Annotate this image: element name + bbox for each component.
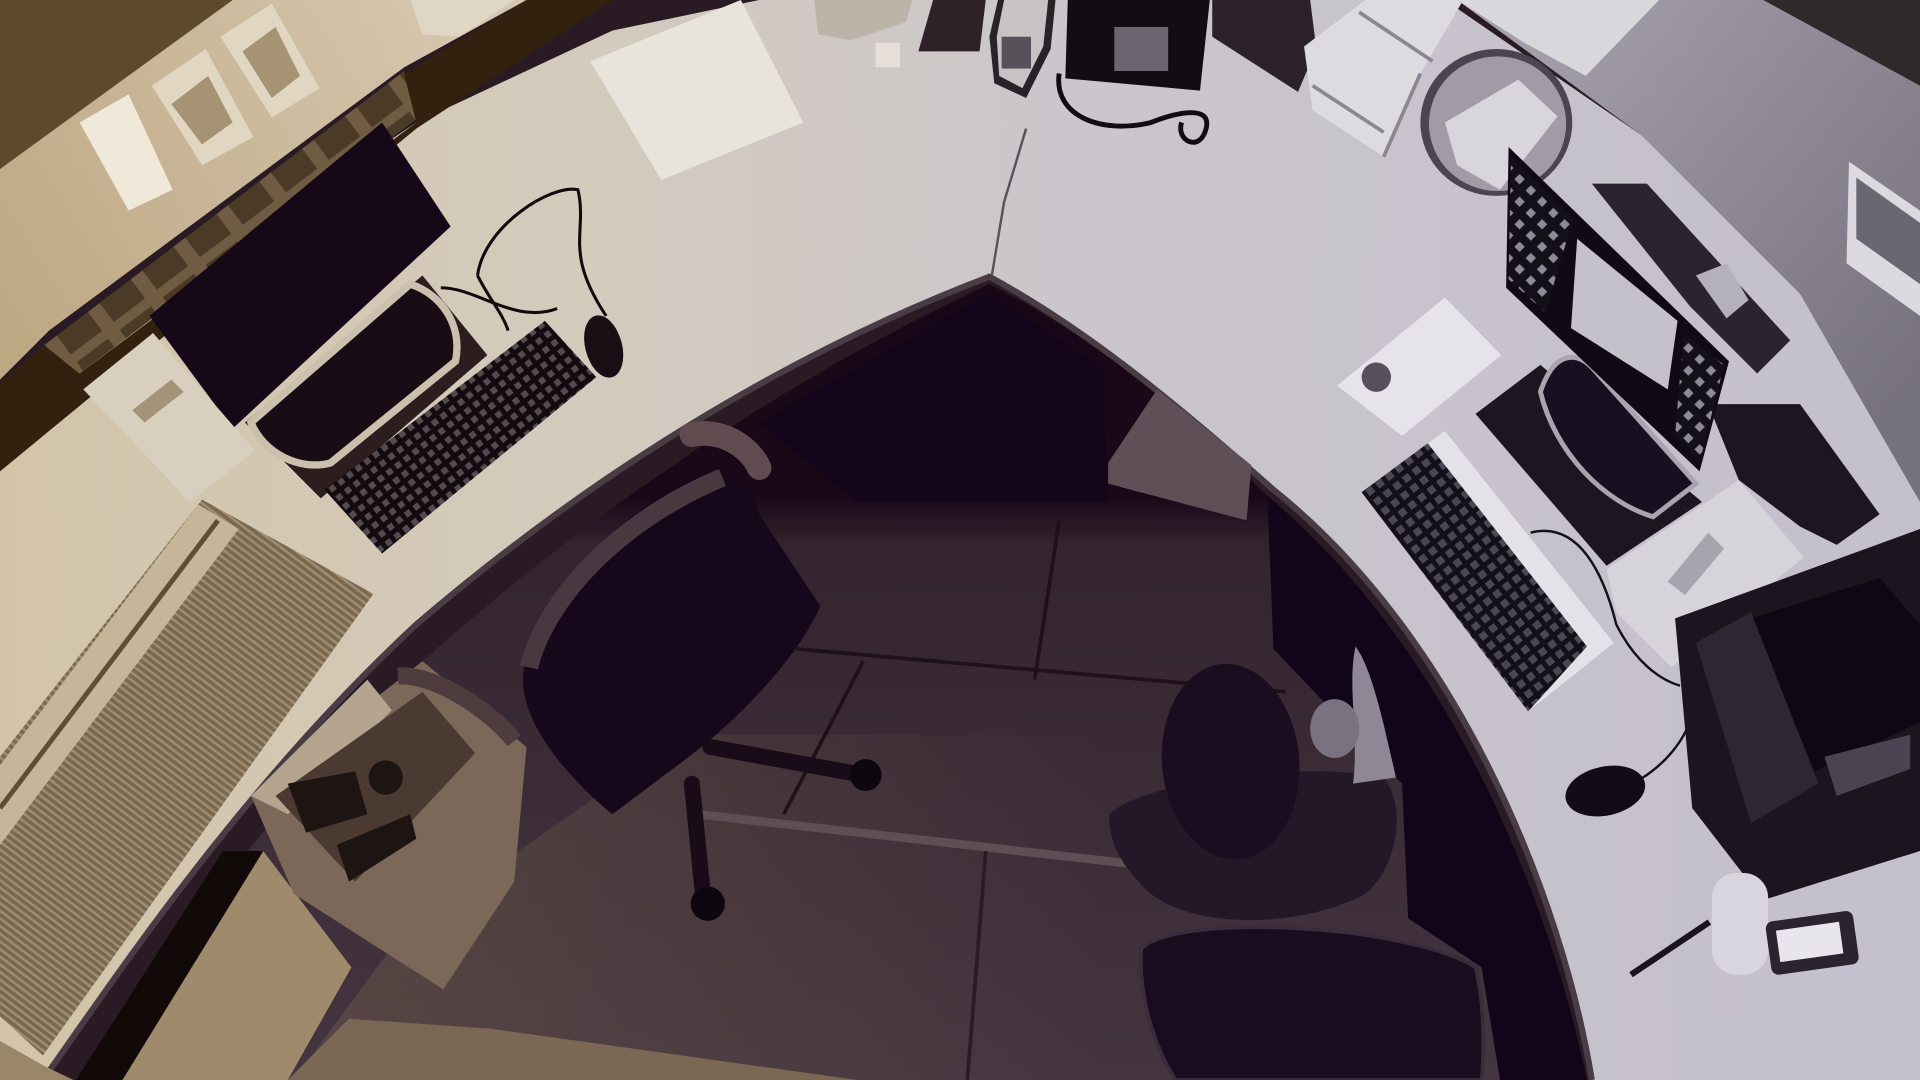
right glass counter bbox=[1457, 0, 1920, 502]
grass: top right bbox=[1763, 0, 1920, 86]
left monitor mat bbox=[245, 276, 487, 498]
chair 1 back rim bbox=[529, 478, 722, 667]
left monitor stand bbox=[251, 284, 457, 465]
dark tray top bbox=[1212, 0, 1316, 92]
paper on glass bbox=[1457, 0, 1659, 76]
sliding panel rails bbox=[0, 504, 239, 845]
large printer tray bbox=[1751, 578, 1920, 771]
right monitor icons bbox=[1509, 157, 1573, 312]
floor step bottom left bbox=[288, 1019, 857, 1080]
cabinet box under desk bbox=[1108, 389, 1251, 520]
desk seam bbox=[992, 129, 1026, 276]
dark under-desk shadow right bbox=[1267, 496, 1587, 1080]
right equipment and cables shadow bbox=[1708, 404, 1880, 545]
chair 1 casters bbox=[691, 759, 882, 921]
panel rail shadow bbox=[0, 520, 218, 808]
paper stacks bbox=[1304, 0, 1463, 157]
dark gap under left counter bbox=[0, 0, 612, 471]
right keyboard bbox=[1362, 431, 1614, 711]
right mouse bbox=[1561, 759, 1650, 823]
screen inner bbox=[1856, 178, 1920, 284]
small boxes on top bbox=[814, 0, 986, 67]
person arm bbox=[1352, 647, 1396, 784]
waste bin bbox=[251, 661, 527, 989]
bottom left strip bbox=[0, 1041, 73, 1080]
right device label bbox=[1696, 263, 1749, 318]
envelope bbox=[1337, 298, 1501, 436]
bottle bbox=[1712, 873, 1768, 975]
small printer slot bbox=[1668, 533, 1724, 595]
cables right bbox=[1531, 531, 1690, 779]
bin clutter bbox=[288, 760, 416, 882]
tag bbox=[1765, 910, 1860, 976]
pen bbox=[1631, 922, 1709, 975]
left glass counter bbox=[0, 0, 527, 380]
bin paper bbox=[251, 680, 392, 814]
brochure shelf strip bbox=[44, 71, 425, 373]
brochures on left counter bbox=[80, 4, 320, 211]
tag label bbox=[1776, 922, 1843, 962]
floor tile lines bbox=[698, 520, 1286, 1080]
person head bbox=[1154, 658, 1307, 865]
chair 1 back bbox=[523, 470, 820, 814]
right mouse mat bbox=[1476, 365, 1702, 566]
right monitor icon column bbox=[1675, 333, 1724, 463]
grass: top left bbox=[0, 0, 233, 169]
screen on right glass bbox=[1847, 162, 1920, 316]
left cable bbox=[441, 189, 606, 331]
bell on envelope bbox=[1362, 362, 1391, 392]
large printer lid bbox=[1696, 612, 1818, 823]
telephone keypad bbox=[1114, 27, 1168, 71]
bowl of notes bbox=[1420, 49, 1572, 196]
large printer control panel bbox=[1824, 735, 1910, 796]
person chair bbox=[1141, 927, 1483, 1080]
right monitor stand bbox=[1540, 357, 1696, 517]
floor warm tint bbox=[294, 735, 1176, 1080]
paper document bbox=[590, 0, 803, 180]
card reader bbox=[989, 0, 1056, 98]
bottom left drawer bbox=[122, 851, 351, 1080]
desk inner edge shadow bbox=[43, 277, 1592, 1080]
right device box bbox=[1592, 184, 1790, 373]
top-left paper bbox=[410, 0, 514, 37]
chair rim on bin bbox=[398, 676, 514, 741]
right monitor bbox=[1506, 147, 1729, 471]
chair 1 arm bbox=[692, 433, 759, 468]
bottom left gap bbox=[76, 851, 263, 1080]
person hands bbox=[1310, 699, 1359, 758]
floor well bbox=[86, 284, 1587, 1080]
small printer right bbox=[1607, 480, 1804, 667]
small printer left slot bbox=[132, 380, 184, 422]
telephone cord bbox=[1059, 73, 1207, 142]
person torso bbox=[1109, 771, 1397, 920]
dark back wall shadow bbox=[759, 294, 1108, 502]
small printer left bbox=[83, 333, 255, 502]
chair 1 base bbox=[692, 747, 857, 906]
desk telephone bbox=[1065, 0, 1210, 91]
left keyboard bbox=[324, 321, 596, 553]
bin interior bbox=[276, 692, 475, 882]
large printer bbox=[1675, 529, 1920, 900]
sliding panel left bbox=[0, 500, 373, 1056]
right monitor document on screen bbox=[1571, 239, 1678, 389]
left monitor bbox=[149, 122, 451, 429]
left mouse bbox=[578, 311, 630, 382]
